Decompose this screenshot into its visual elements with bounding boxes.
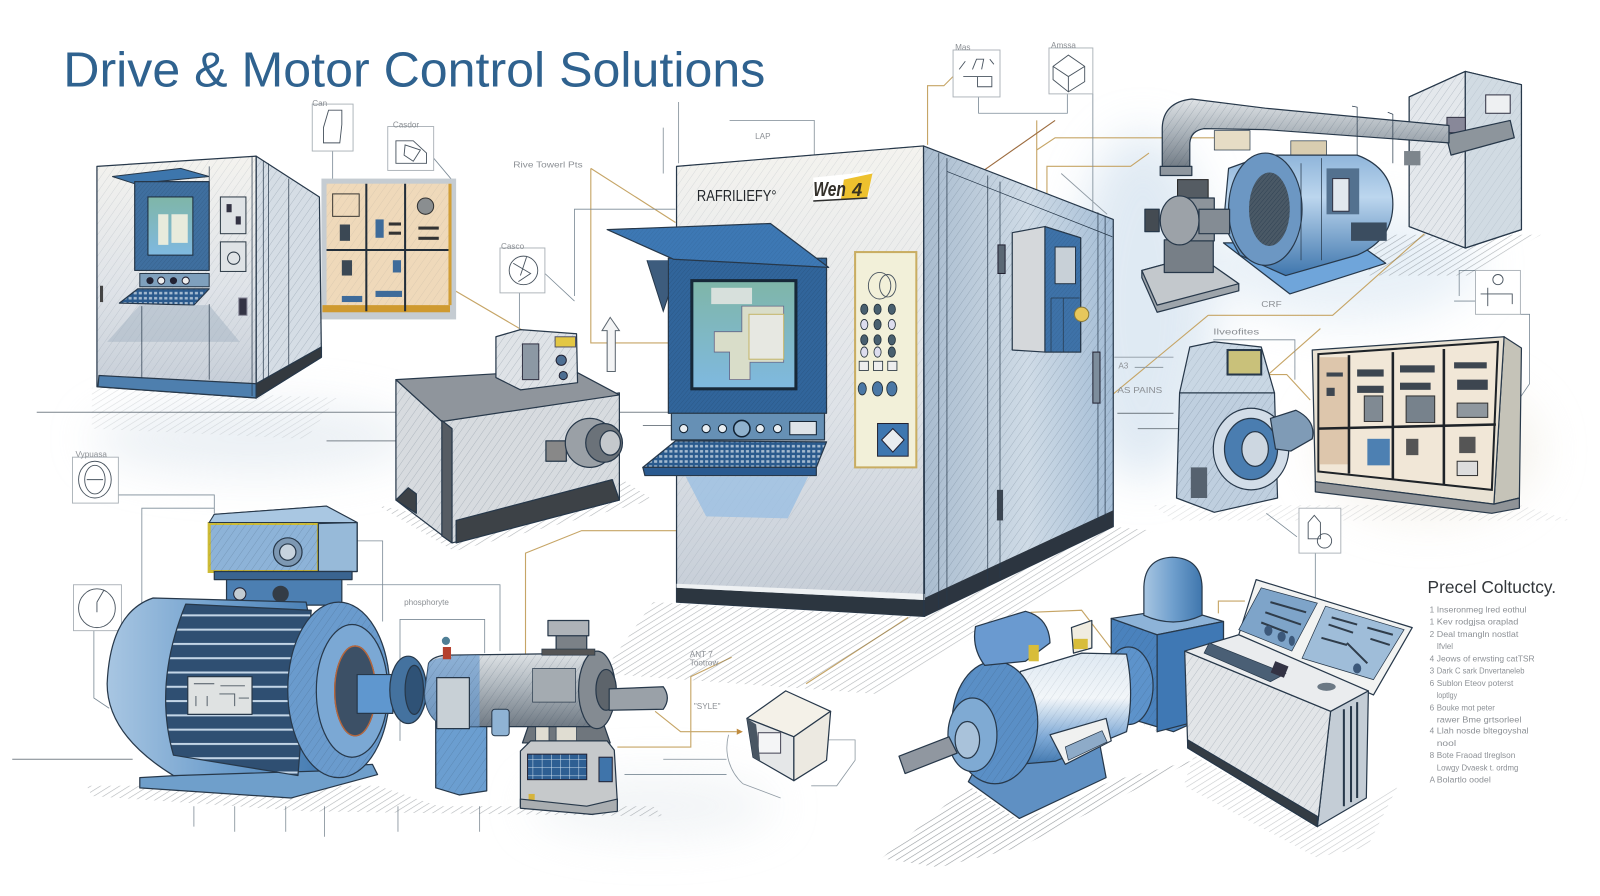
title: Drive & Motor Control Solutions (63, 44, 765, 98)
icon box: gear (500, 242, 545, 293)
icon box: top centre 1: Mas (955, 43, 971, 52)
front bell (288, 602, 390, 778)
cylinder body (424, 653, 614, 727)
lower box (520, 741, 617, 814)
icon box: lower centre (1299, 508, 1341, 553)
icon box: top centre 2: Amssa (1051, 41, 1076, 50)
side box (1012, 227, 1089, 352)
machine: lower right motor (899, 557, 1223, 818)
list items: Deal tmangln nostlat (1437, 630, 1519, 639)
machine: table with knob (396, 369, 622, 543)
list items: Jeows of erwsting catTSR (1437, 654, 1535, 663)
right cabinet (1409, 71, 1521, 248)
list items: Kev rodgjsa oraplad (1437, 618, 1519, 627)
list items: 8 (1430, 751, 1435, 760)
dome (1144, 557, 1202, 622)
soft blue washes (92, 133, 1541, 837)
icon box: left gauge (72, 450, 118, 503)
list items: Dark C sark Dnvertaneleb (1437, 667, 1525, 676)
icon box: right (1476, 270, 1520, 314)
icon box: gear: Casco (501, 242, 525, 251)
terminal box (1050, 718, 1111, 764)
icon box: top left 2: Casdor (393, 121, 419, 130)
list items: 6 (1430, 703, 1435, 712)
icon box: top left 2 (388, 121, 434, 170)
output shaft (609, 687, 667, 710)
list items: A (1430, 776, 1436, 785)
label: a3: A3 (1118, 361, 1129, 370)
end cap (579, 651, 615, 729)
nameplate (188, 677, 252, 714)
logo: Wen (813, 179, 846, 201)
list items: Bote Fraoad tlreglson (1437, 751, 1515, 760)
list items: Bouke mot peter (1437, 703, 1495, 712)
base (140, 764, 378, 798)
machine: console (1185, 580, 1412, 827)
control strip (671, 413, 824, 440)
machine: small actuator on table (496, 330, 578, 390)
list items: Bolartlo oodel (1437, 776, 1491, 785)
list items: 4 (1430, 727, 1435, 736)
floor hatching shadows (87, 235, 1571, 867)
list items: 1 (1430, 618, 1435, 627)
stand (436, 678, 487, 795)
list items: loptlgy (1437, 691, 1458, 700)
machine: left control cabinet (97, 156, 321, 398)
icon box: top left 1: Can (312, 99, 327, 108)
neck to box (522, 719, 610, 743)
machine: large blue motor (107, 506, 427, 798)
label: lap: LAP (755, 132, 771, 141)
label: as pains: AS PAINS (1117, 386, 1163, 395)
ribs (166, 604, 311, 776)
label: art 7: Tootrow (690, 658, 718, 667)
blue motor (1223, 153, 1393, 294)
monitor screen (692, 281, 796, 389)
label: tiny caption: phosphoryte (404, 598, 449, 607)
label: art 7 (690, 650, 721, 711)
cabinet body (1317, 691, 1368, 827)
end housing (952, 661, 1038, 784)
gearbox (1111, 618, 1223, 732)
front face (677, 146, 924, 616)
icon: up arrow (602, 317, 619, 371)
list items: Ifvlel (1437, 642, 1453, 651)
list items (1430, 605, 1535, 785)
logo (813, 171, 872, 201)
label: CRF (1261, 300, 1282, 309)
list items: rawer Bme grtsorleel (1437, 716, 1522, 725)
text block: product list (1428, 577, 1556, 785)
panel: right control board (1312, 337, 1521, 513)
shaft and coupling (357, 675, 393, 713)
icon: small carton (727, 691, 855, 798)
pipe (1160, 99, 1449, 176)
panel: beige control board (321, 179, 456, 319)
base (968, 735, 1106, 818)
neck (214, 571, 352, 605)
machine: pipe and right cabinet (1142, 71, 1521, 312)
icon box: left gauge: Vypuasa (76, 450, 107, 459)
terminal box (209, 506, 357, 571)
list items: nool (1437, 739, 1456, 748)
icon box: left dial (73, 585, 121, 631)
list items: Llah nosde bltegoyshal (1437, 727, 1529, 736)
top small motor (975, 611, 1050, 665)
shaft (899, 737, 957, 774)
list items: Inseronmeg lred eothul (1437, 605, 1527, 614)
cylinder body (1005, 653, 1131, 765)
console top (1185, 635, 1368, 711)
list items: 6 (1430, 679, 1435, 688)
valve (443, 647, 451, 659)
list items: 2 (1430, 630, 1435, 639)
keyboard (643, 441, 827, 518)
icon box: top centre 1 (953, 43, 1000, 97)
brand label: RAFRILIEFY° (697, 188, 777, 205)
list items: Sublon Eteov poterst (1437, 679, 1514, 688)
list items: Lowgy Dvaesk t. ordmg (1437, 763, 1519, 772)
list items: 4 (1430, 654, 1435, 663)
label: drive tower: Rive Towerl Pts (513, 160, 583, 169)
label: ilveafites: Ilveofites (1213, 328, 1259, 337)
rear body (107, 598, 337, 776)
screen panel (1239, 580, 1412, 695)
machine: main drive cabinet (607, 146, 1113, 616)
logo: 4 (851, 179, 862, 200)
indicator panel (855, 252, 916, 467)
icon box: top centre 2 (1049, 41, 1093, 94)
list items: 1 (1430, 605, 1435, 614)
label: art 7: "SYLE" (694, 702, 721, 711)
side face (923, 146, 1113, 616)
grey coupling unit (1142, 180, 1239, 312)
label: art 7: ANT 7 (690, 650, 713, 659)
machine: wheel unit, right middle (1177, 342, 1313, 512)
top nut (556, 635, 587, 653)
heading: Precel Coltuctcy. (1428, 577, 1556, 597)
door handles (997, 245, 1100, 520)
machine: coupled pump unit (424, 620, 667, 814)
icon box: top left 1 (312, 99, 353, 151)
neck (1104, 647, 1153, 725)
monitor housing (607, 223, 829, 413)
list items: 3 (1430, 667, 1435, 676)
